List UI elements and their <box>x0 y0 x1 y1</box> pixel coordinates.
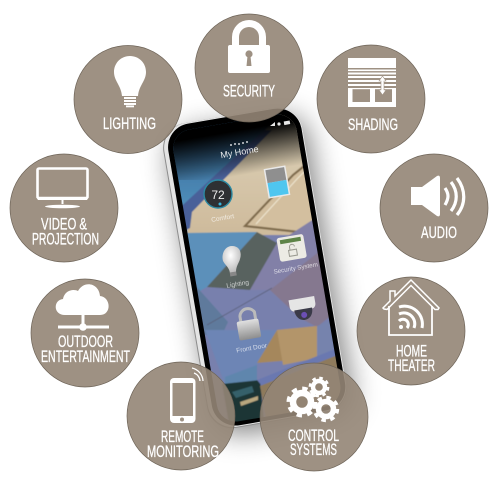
circle: home theater: THEATER <box>388 356 435 375</box>
circle: shading <box>317 45 425 153</box>
circle: control systems: SYSTEMS <box>290 440 337 459</box>
label: SHADING <box>348 115 398 134</box>
icon: house with signal <box>383 280 439 335</box>
icon: speaker <box>411 176 464 216</box>
label: CONTROL <box>288 426 339 445</box>
phone screen wallpaper <box>173 114 340 422</box>
circle: audio <box>380 154 488 262</box>
lighting tile <box>222 246 250 290</box>
icon: network cloud <box>56 284 109 331</box>
comfort thermostat tile <box>204 180 235 224</box>
label: HOME <box>396 342 427 360</box>
shading tile <box>264 165 290 199</box>
front door lock tile: Front Door <box>236 342 268 355</box>
circle: security <box>195 14 303 122</box>
label: AUDIO <box>421 223 457 242</box>
comfort thermostat tile: Comfort <box>211 213 235 224</box>
icon: gears <box>288 378 338 420</box>
phone drop shadow <box>166 112 355 438</box>
circle: video and projection: PROJECTION <box>32 230 99 248</box>
label: SECURITY <box>223 82 275 100</box>
circle: outdoor entertainment <box>31 279 139 387</box>
circle: remote monitoring: MONITORING <box>147 442 219 461</box>
phone body <box>159 104 350 432</box>
icon: mobile phone with waves <box>170 368 203 423</box>
icon: padlock <box>228 20 270 73</box>
label: REMOTE <box>161 427 204 446</box>
icon: television <box>36 168 89 208</box>
icon: window shade <box>348 58 396 107</box>
label: LIGHTING <box>103 114 156 133</box>
circle: remote monitoring <box>127 362 235 470</box>
screen title: My Home <box>220 144 259 160</box>
circle: home theater <box>357 277 465 385</box>
lighting tile: Lighting <box>226 279 250 290</box>
circle: control systems <box>260 363 368 471</box>
comfort thermostat tile: 72 <box>211 188 225 202</box>
status bar icons <box>270 121 290 126</box>
circle: outdoor entertainment: ENTERTAINMENT <box>41 347 130 366</box>
circle: video and projection <box>10 154 118 262</box>
label: OUTDOOR <box>58 332 113 351</box>
smartphone <box>163 108 345 428</box>
camera tile <box>289 296 318 322</box>
security system tile <box>273 234 318 276</box>
icon: light bulb <box>114 56 146 107</box>
front door lock tile <box>236 308 268 355</box>
security system tile: Security System <box>273 261 318 276</box>
label: VIDEO & <box>41 214 87 234</box>
circle: lighting <box>74 46 182 154</box>
